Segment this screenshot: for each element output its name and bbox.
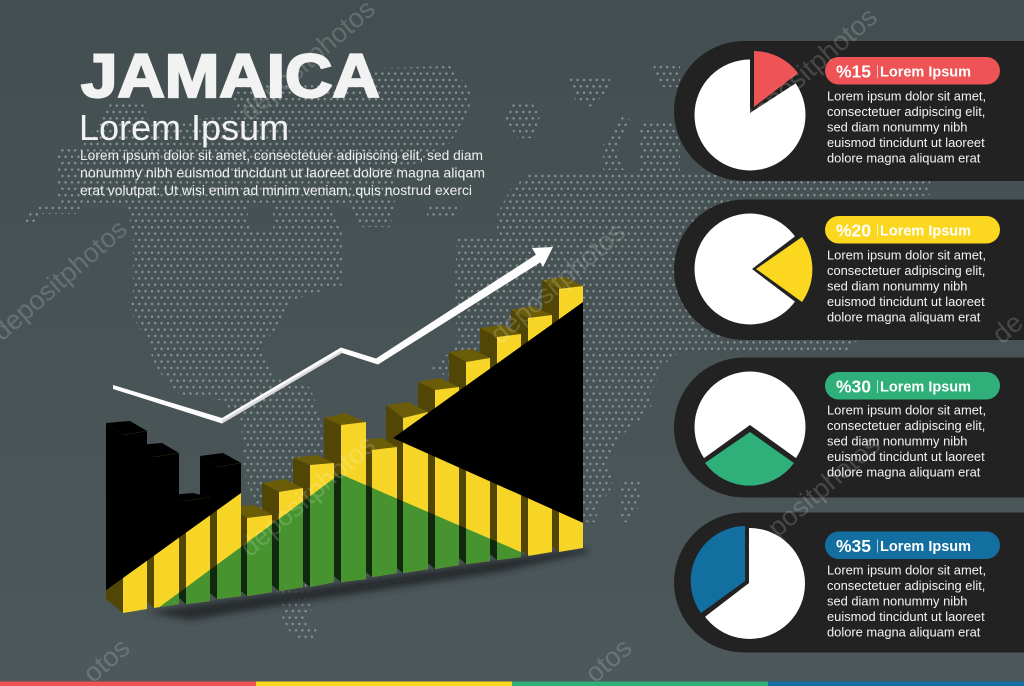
bar 11 [418,378,459,569]
body text 15: consectetuer adipiscing elit, [827,104,985,119]
body text 30: euismod tincidunt ut laoreet [827,449,985,464]
bar 6 [262,479,303,591]
body text 35: euismod tincidunt ut laoreet [827,609,985,624]
label pill 30: Lorem Ipsum [880,380,971,396]
bar 3 [179,493,210,604]
body text 30: consectetuer adipiscing elit, [827,418,985,433]
body text 15: euismod tincidunt ut laoreet [827,135,985,150]
body text 15: dolore magna aliquam erat [827,150,981,166]
panel: 20 percent [674,200,1024,340]
intro paragraph [80,147,485,198]
intro paragraph: erat volutpat. Ut wisi enim ad minim veniam, quis nostrud exerci [80,182,472,198]
body text 35: sed diam nonummy nibh [827,594,967,608]
pie 30 percent [694,372,806,490]
bottom colour strip [0,682,1024,686]
pie 20 percent [694,214,812,324]
label pill 15: Lorem Ipsum [880,64,971,80]
body text 15: sed diam nonummy nibh [827,120,967,134]
body text 35: dolore magna aliquam erat [827,624,981,640]
panel: 15 percent [674,41,1024,181]
watermarks: depositphotos [739,430,886,563]
chart shadow [147,548,590,620]
title: JAMAICA [81,43,380,110]
label pill 35: %35 [836,536,871,556]
bar 10 [386,402,428,573]
bar 13 [480,325,521,560]
body text 30: sed diam nonummy nibh [827,434,967,448]
label pill 30: %30 [836,376,871,396]
label pill 35: Lorem Ipsum [880,539,971,555]
body text 15: Lorem ipsum dolor sit amet, [827,88,986,104]
body text 35: Lorem ipsum dolor sit amet, [827,562,986,578]
pie 35 percent [690,526,805,639]
body text 20: Lorem ipsum dolor sit amet, [827,248,986,262]
bar 1 [106,421,147,613]
watermarks: depositphotos [484,217,631,350]
body text 20: euismod tincidunt ut laoreet [827,294,985,309]
body text 20: consectetuer adipiscing elit, [827,263,985,278]
body text 30: dolore magna aliquam erat [827,464,981,480]
dotted world map [26,66,930,638]
body text 20: sed diam nonummy nibh [827,278,967,294]
label pill 20: Lorem Ipsum [880,224,971,240]
bar 2 [147,443,179,608]
intro paragraph: Lorem ipsum dolor sit amet, consectetuer adipiscing elit, sed diam [80,147,483,163]
label pill 35 [825,532,1000,559]
watermarks: depositphotos [234,430,381,563]
watermarks: depositphotos [736,2,883,135]
3D bar chart with Jamaica flag [106,277,583,613]
bar 9 [366,438,397,577]
panel: 30 percent [674,358,1024,498]
bar 8 [324,413,366,582]
bar 5 [241,505,272,596]
bar 14 [511,306,552,556]
bar 4 [200,453,241,599]
label pill 30 [825,372,1000,400]
label pill 15: %15 [836,62,871,82]
label pill 20: %20 [836,220,871,240]
body text 35: consectetuer adipiscing elit, [827,578,985,593]
subtitle: Lorem Ipsum [79,107,289,148]
body text 30: Lorem ipsum dolor sit amet, [827,402,986,418]
body text 20: dolore magna aliquam erat [827,310,981,324]
label pill 15 [825,57,1000,84]
bar 12 [449,349,490,564]
label pill 20 [825,216,1000,244]
bar 15 [542,277,583,552]
pie 15 percent [694,50,810,170]
intro paragraph: nonummy nibh euismod tincidunt ut laoreet dolore magna aliqam [80,164,485,180]
trend arrow [113,247,553,424]
panel: 35 percent [674,512,1024,652]
bar 7 [293,455,334,587]
